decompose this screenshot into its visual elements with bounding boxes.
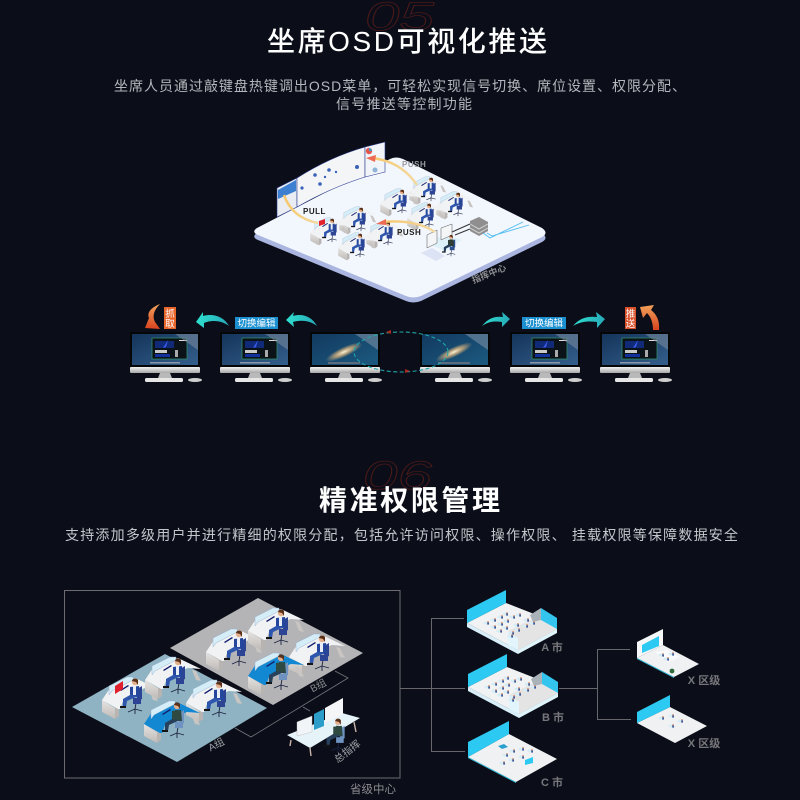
platform slab bbox=[254, 158, 546, 302]
label: C city: C 市 bbox=[541, 775, 563, 789]
label: group B: B组 bbox=[308, 676, 329, 695]
monitor 6 bbox=[600, 332, 672, 382]
text block: section 1 description bbox=[114, 78, 686, 112]
label: A city: A 市 bbox=[541, 640, 563, 654]
label: X district 2: X 区级 bbox=[688, 736, 720, 750]
tag: push: 送 bbox=[626, 318, 636, 330]
tag: switch edit left: 切换编辑 bbox=[237, 318, 276, 330]
arrow: teal left 1 bbox=[196, 312, 229, 328]
arrow: push orange bbox=[640, 305, 659, 330]
room: A city bbox=[467, 590, 557, 654]
curved video wall bbox=[277, 142, 385, 217]
floor: group B bbox=[170, 598, 363, 705]
tag: push bbox=[625, 307, 636, 330]
connector lines: hierarchy bbox=[400, 618, 631, 752]
label: X district 1: X 区级 bbox=[688, 673, 720, 687]
arrow: top push bbox=[366, 155, 417, 185]
diagram: monitor signal flow bbox=[130, 304, 672, 382]
title: section 2: 精准权限管理 bbox=[319, 485, 500, 516]
title: section 1: 坐席OSD可视化推送 bbox=[267, 26, 547, 57]
workstations: group B bbox=[206, 608, 345, 695]
tag: push: 推 bbox=[626, 308, 636, 320]
arrow: teal right 1 bbox=[482, 312, 510, 327]
server rack bbox=[452, 217, 529, 238]
room: C city bbox=[468, 721, 557, 783]
tag: switch edit right: 切换编辑 bbox=[525, 318, 563, 330]
panel: command center platform bbox=[254, 142, 546, 302]
panel frame bbox=[64, 590, 400, 778]
label: pull: PULL bbox=[303, 207, 326, 216]
monitor 2 bbox=[220, 332, 292, 382]
text block: section 1 description: 坐席人员通过敲键盘热键调出OSD菜单，可轻松实现信号切换、席位设置、权限分配、 bbox=[114, 78, 686, 94]
workstations: group A bbox=[102, 657, 242, 743]
arrow: pull bbox=[284, 195, 325, 226]
operator desk bbox=[421, 224, 462, 261]
text block: section 2 description: 支持添加多级用户并进行精细的权限分配，包括允许访问权限、操作权限、 挂载权限等保障数据安全 bbox=[65, 527, 738, 543]
label: top push: PUSH bbox=[402, 160, 426, 169]
label: lower push: PUSH bbox=[397, 228, 421, 237]
arrow: grab bbox=[145, 304, 160, 329]
room: X district 1 bbox=[637, 629, 699, 678]
room: B city bbox=[468, 654, 558, 718]
label: commander: 总指挥 bbox=[331, 737, 363, 766]
label: group A: A组 bbox=[206, 735, 227, 754]
connector: groups to commander bbox=[235, 671, 348, 737]
tag: grab bbox=[164, 307, 176, 330]
arrow: teal right 2 bbox=[573, 312, 605, 328]
tag: grab: 取 bbox=[165, 319, 175, 330]
monitor 1 bbox=[130, 332, 202, 382]
commander desk bbox=[287, 698, 360, 756]
tag: grab: 抓 bbox=[165, 308, 175, 320]
floor: group A bbox=[72, 654, 267, 762]
room: X district 2 bbox=[637, 695, 707, 743]
label: provincial center: 省级中心 bbox=[350, 783, 396, 796]
dashed loop between monitors bbox=[354, 330, 448, 373]
decorative number 06: 06 bbox=[363, 454, 432, 498]
label: command center: 指挥中心 bbox=[470, 262, 508, 285]
text block: section 1 description: 信号推送等控制功能 bbox=[336, 96, 472, 112]
monitor 3 bbox=[310, 332, 382, 382]
monitor 4 bbox=[420, 332, 492, 382]
label: B city: B 市 bbox=[542, 710, 564, 724]
panel: provincial center bbox=[64, 590, 400, 778]
arrow: lower push bbox=[376, 219, 435, 232]
arrow: teal left 2 bbox=[286, 312, 317, 327]
monitor 5 bbox=[510, 332, 582, 382]
workstations bbox=[310, 177, 473, 260]
